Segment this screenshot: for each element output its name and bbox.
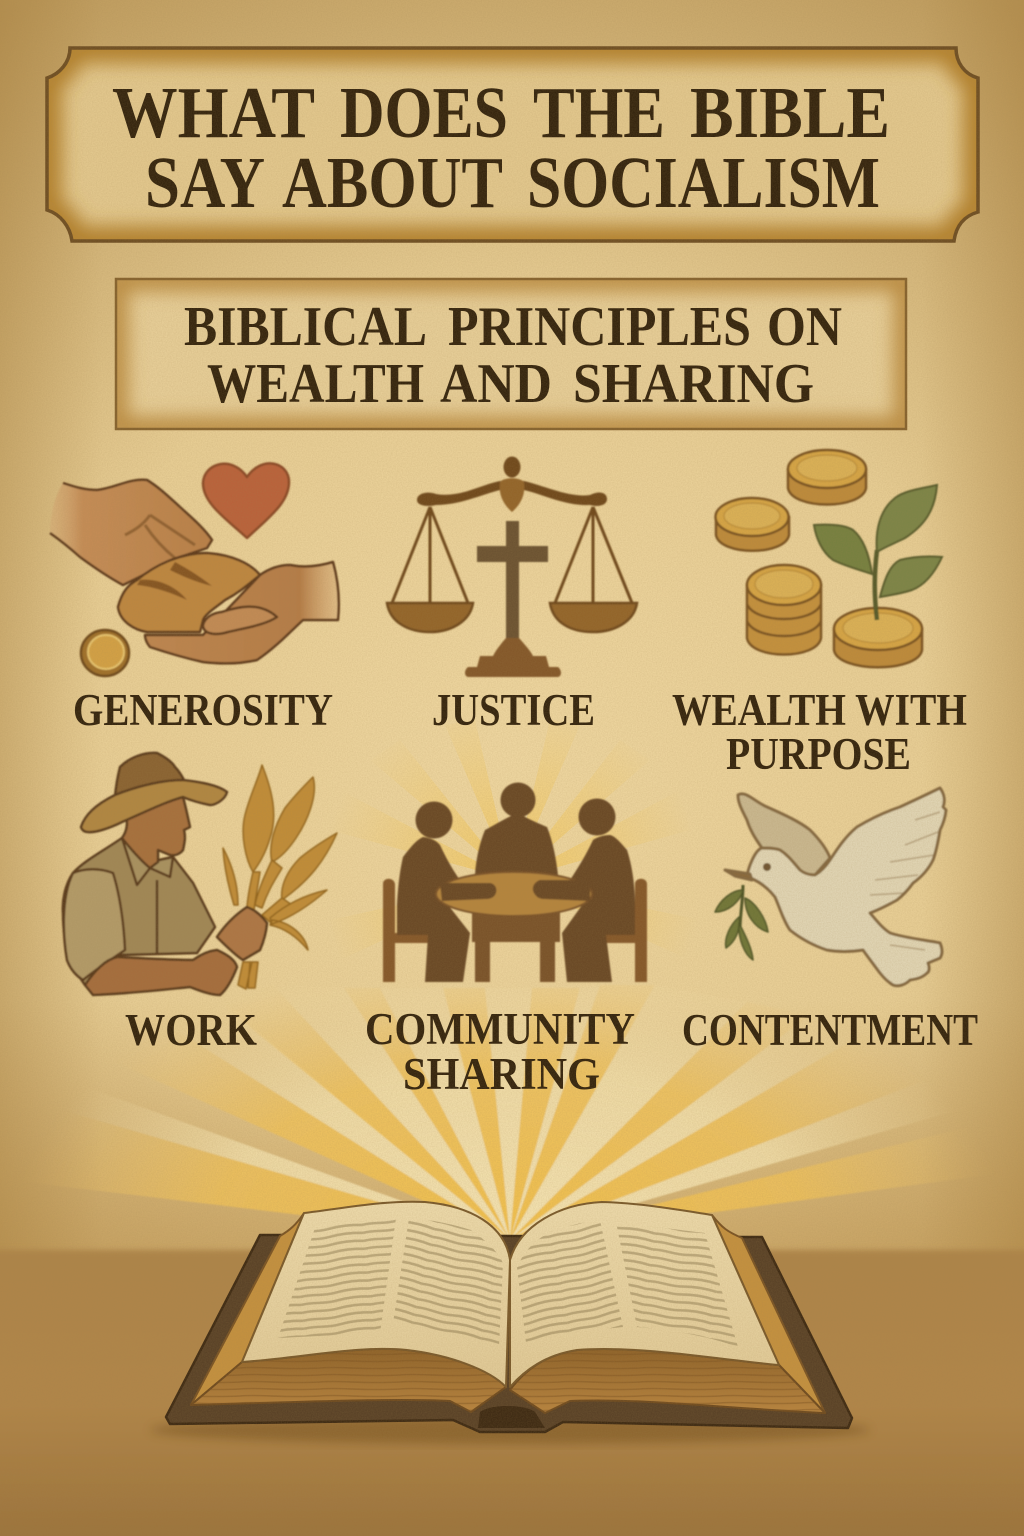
left page bbox=[242, 1202, 510, 1387]
subtitle text bbox=[184, 296, 842, 415]
subtitle banner bbox=[116, 279, 906, 429]
upper hand bbox=[50, 480, 212, 585]
title text: ABOUT bbox=[282, 142, 503, 223]
subtitle text: SHARING bbox=[573, 353, 814, 415]
thumb bbox=[203, 607, 277, 634]
glow rays behind community bbox=[330, 720, 700, 960]
wing feather lines bbox=[870, 812, 940, 950]
dove body and wing bbox=[747, 788, 946, 986]
icon: dove with olive branch bbox=[715, 788, 946, 986]
beam bbox=[417, 481, 607, 506]
sleeve bbox=[64, 869, 125, 980]
left page text bbox=[278, 1218, 503, 1347]
right page edge bbox=[712, 1215, 825, 1413]
light rays from the book bbox=[0, 984, 1024, 1240]
label: wealth with purpose: WEALTH WITH bbox=[672, 685, 967, 735]
title text: THE bbox=[533, 72, 665, 153]
subtitle text: PRINCIPLES bbox=[448, 296, 751, 358]
shirt and body bbox=[63, 838, 215, 985]
right page bbox=[510, 1202, 779, 1387]
beak bbox=[725, 870, 752, 880]
label: community sharing bbox=[365, 1004, 635, 1099]
right chair bbox=[587, 879, 647, 982]
hat bbox=[81, 753, 227, 832]
label: wealth with purpose: PURPOSE bbox=[726, 729, 911, 779]
wheat bundle bbox=[223, 765, 337, 989]
lower background shading bbox=[0, 1000, 1024, 1260]
right figure bbox=[533, 798, 635, 982]
left pan bbox=[387, 507, 473, 632]
back wing bbox=[738, 794, 830, 875]
upper hand bbox=[217, 907, 267, 960]
left page edge bbox=[191, 1213, 304, 1405]
book shadow bbox=[150, 1416, 870, 1444]
title text: WHAT bbox=[112, 72, 315, 153]
left chair bbox=[383, 879, 445, 982]
wooden table bbox=[0, 1250, 1024, 1536]
subtitle text: AND bbox=[440, 353, 552, 415]
subtitle text: ON bbox=[767, 296, 842, 358]
label: wealth with purpose bbox=[672, 685, 967, 779]
label: generosity: GENEROSITY bbox=[73, 685, 333, 735]
label: justice: JUSTICE bbox=[432, 685, 595, 735]
coin stack bbox=[747, 565, 821, 654]
left figure bbox=[397, 802, 496, 982]
title text: BIBLE bbox=[690, 72, 890, 153]
icon: justice scales and cross bbox=[387, 456, 637, 677]
table bbox=[436, 872, 592, 982]
left coin bbox=[716, 498, 789, 551]
collar and shirt placket bbox=[122, 838, 173, 955]
top coin bbox=[788, 450, 866, 504]
title text bbox=[112, 72, 890, 223]
left page block bbox=[191, 1349, 506, 1412]
olive branch bbox=[715, 885, 768, 960]
face and neck bbox=[122, 797, 190, 868]
icon: wealth with purpose bbox=[716, 450, 942, 667]
label: work: WORK bbox=[125, 1005, 257, 1055]
icon: farmer with wheat bbox=[63, 753, 337, 995]
label: community sharing: COMMUNITY bbox=[365, 1004, 635, 1054]
cover bbox=[166, 1235, 852, 1432]
title banner bbox=[47, 48, 978, 241]
centre finial bbox=[500, 456, 524, 512]
eye bbox=[763, 863, 771, 871]
subtitle text: BIBLICAL bbox=[184, 296, 427, 358]
label: community sharing: SHARING bbox=[403, 1049, 600, 1099]
title text: DOES bbox=[340, 72, 508, 153]
back figure bbox=[475, 782, 558, 875]
title text: SAY bbox=[145, 142, 265, 223]
title text: SOCIALISM bbox=[527, 142, 880, 223]
right page text bbox=[517, 1220, 738, 1347]
subtitle plaque bbox=[116, 279, 906, 429]
subtitle text: WEALTH bbox=[207, 353, 424, 415]
icon: open book bbox=[150, 1202, 870, 1444]
bread bbox=[118, 553, 260, 632]
right pan bbox=[550, 507, 637, 632]
cross and stand bbox=[465, 521, 561, 677]
plant coin bbox=[834, 608, 922, 667]
coin bbox=[81, 630, 129, 676]
right page block bbox=[510, 1349, 825, 1413]
plant bbox=[814, 485, 942, 620]
spine bbox=[478, 1406, 545, 1428]
icon: community sharing bbox=[383, 782, 647, 982]
heart bbox=[203, 463, 289, 538]
forearm and lower hand bbox=[85, 950, 237, 995]
icon: generosity bbox=[50, 463, 339, 676]
lower hand bbox=[145, 562, 339, 663]
banner plaque bbox=[47, 48, 978, 241]
